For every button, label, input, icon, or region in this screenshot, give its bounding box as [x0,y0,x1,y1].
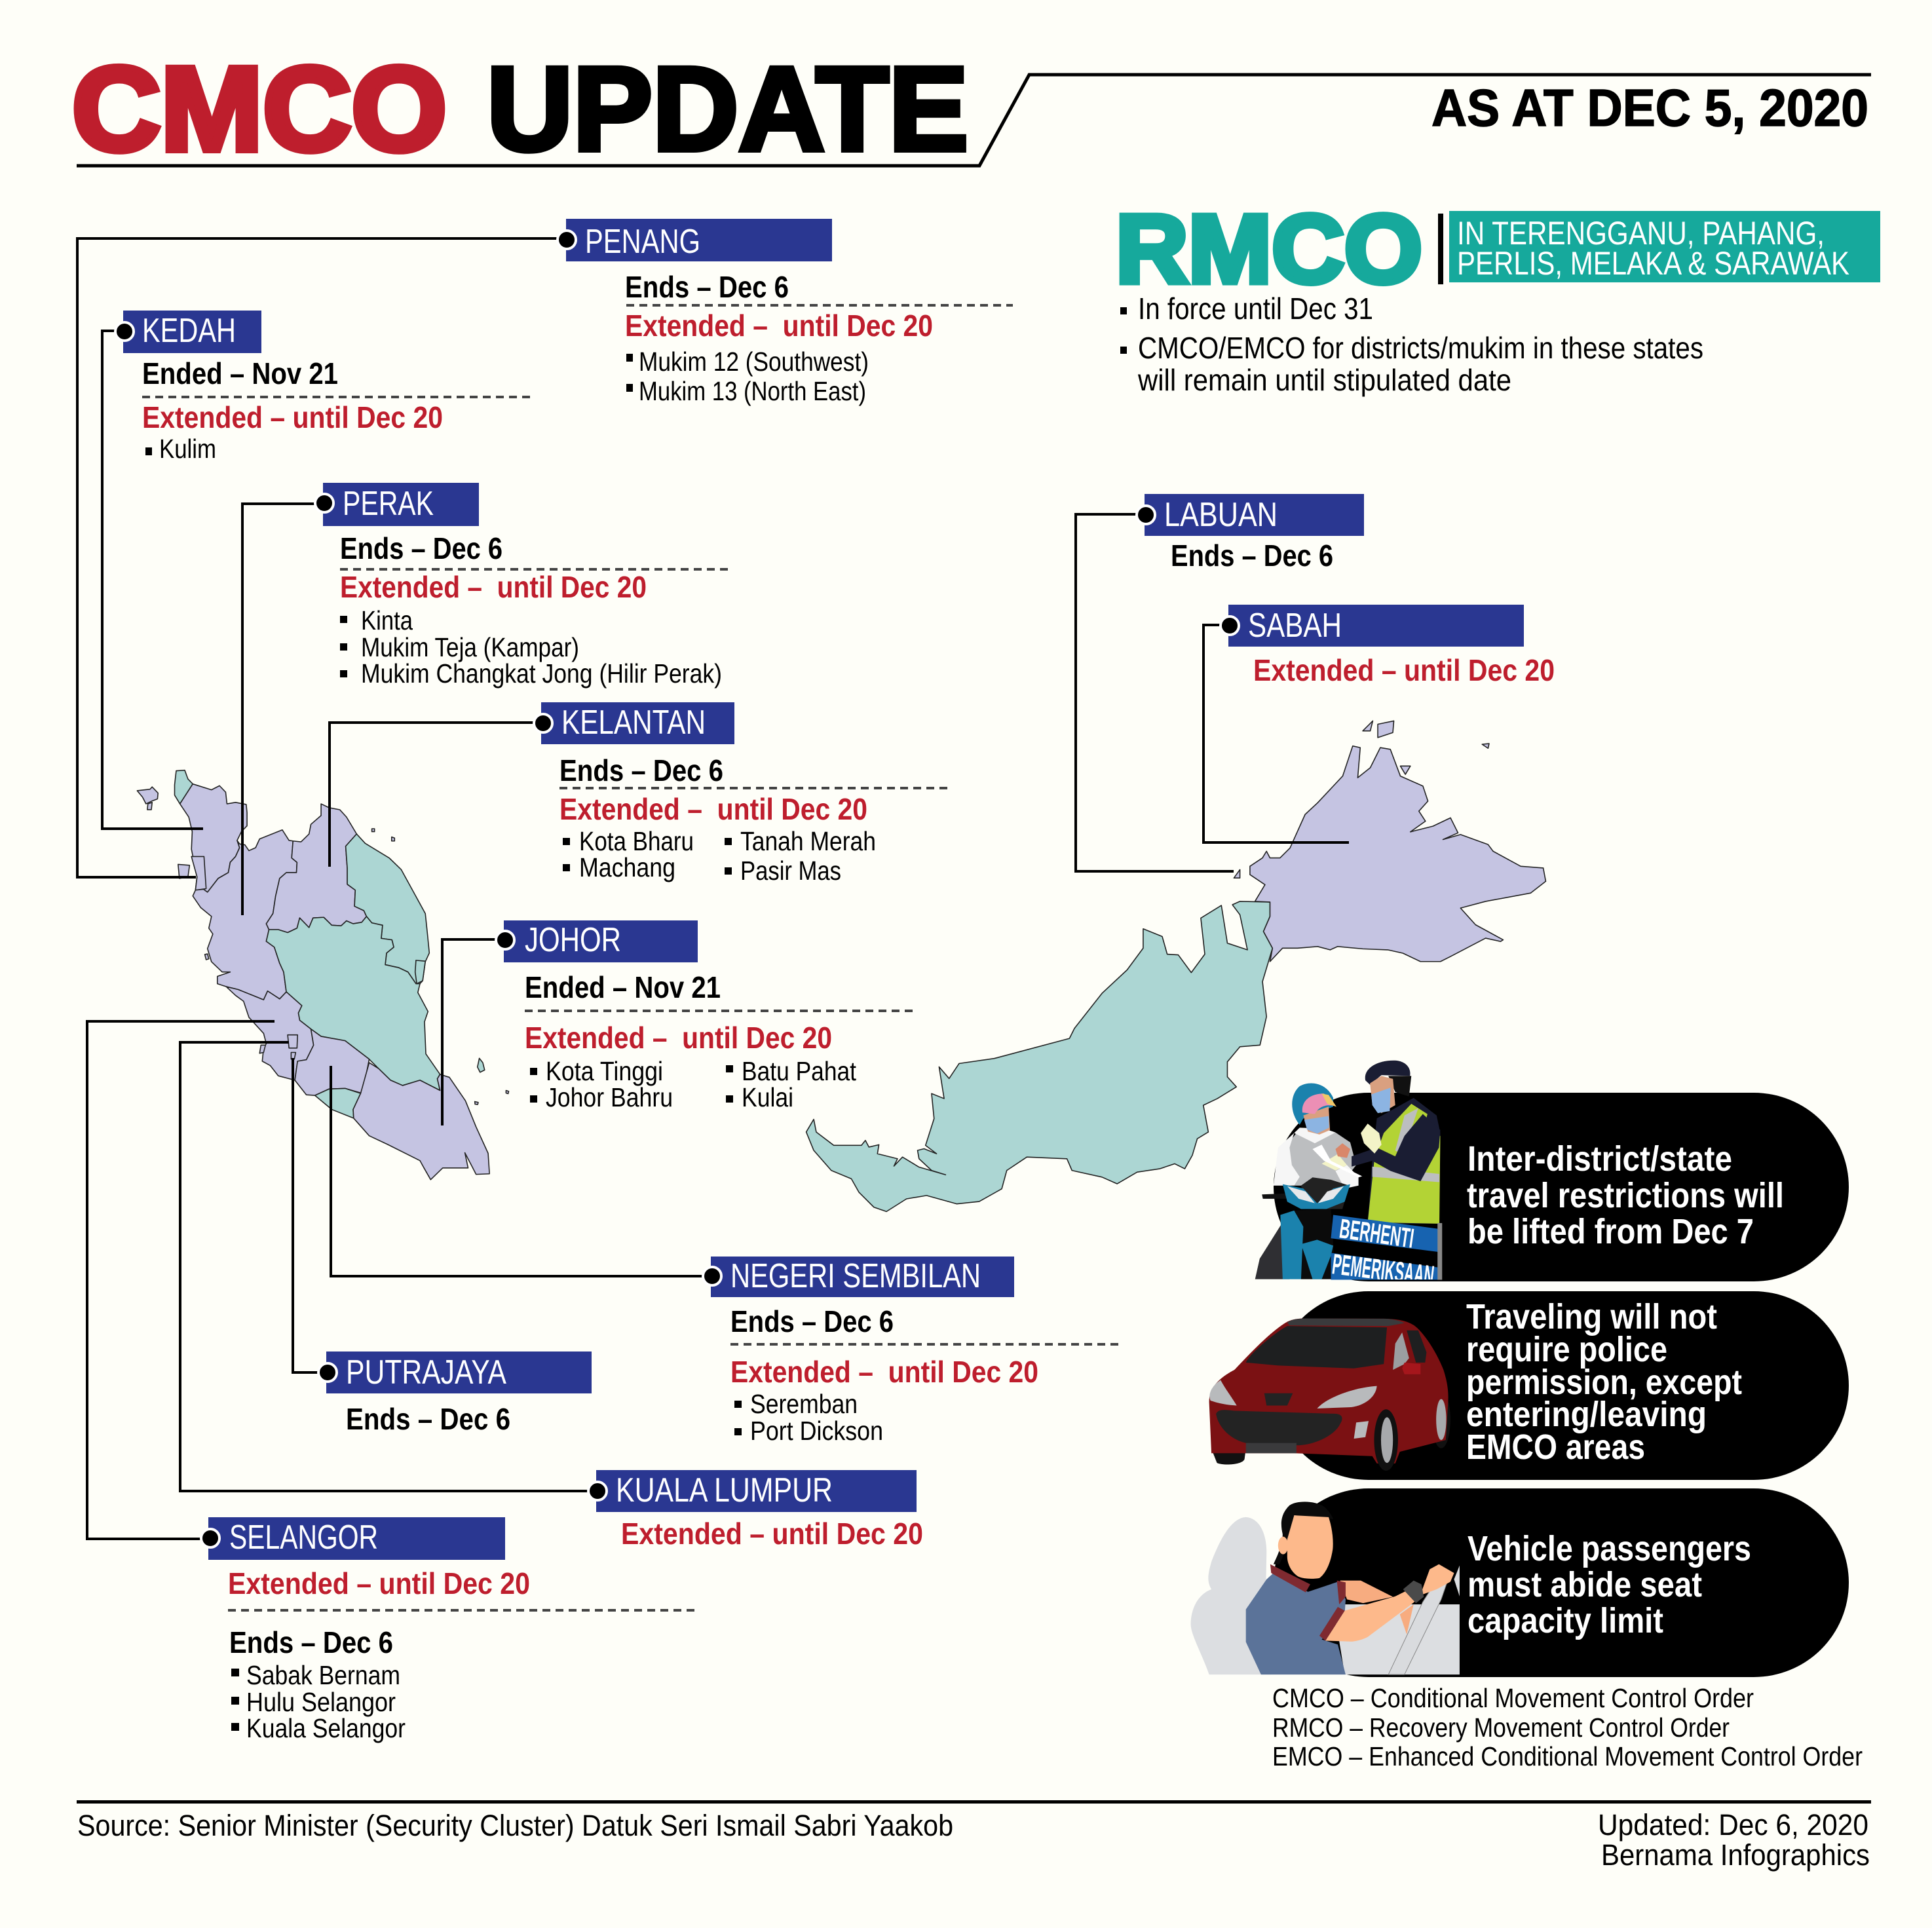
panel: Selangor [201,1517,698,1743]
panel: RMCO: In force until Dec 31 [1138,292,1373,326]
panel: Kuala Lumpur [588,1470,923,1551]
panel: Perak: Ends – Dec 6 [340,531,502,565]
title: CMCO UPDATE: UPDATE [487,42,968,176]
source: Source: Senior Minister (Security Cluster) Datuk Seri Ismail Sabri Yaakob [77,1809,953,1842]
panel: Penang [558,219,1013,406]
panel: Kedah: Extended – until Dec 20 [142,400,443,434]
map: peninsular Malaysia [137,770,508,1180]
panel: Johor [496,920,913,1112]
panel: Penang: Extended – until Dec 20 [625,309,933,343]
panel: Penang: PENANG [585,223,700,261]
icon: police checkpoint: BERHENTI [1338,1213,1416,1254]
panel: Kelantan: Tanah Merah [740,826,876,856]
panel: Selangor: SELANGOR [229,1519,378,1557]
map: Sarawak and Sabah [806,721,1545,1211]
panel: Kelantan: Pasir Mas [740,856,841,886]
credits: Updated: Dec 6, 2020 [1598,1808,1868,1842]
text: police permission: entering/leaving [1466,1395,1707,1434]
title: CMCO UPDATE: CMCO [72,42,447,176]
panel: RMCO: PERLIS, MELAKA & SARAWAK [1457,245,1849,282]
panel: Penang: Mukim 12 (Southwest) [639,347,869,377]
panel: Negeri Sembilan: Port Dickson [750,1416,883,1446]
text: travel restrictions [1467,1139,1784,1251]
panel: Negeri Sembilan: NEGERI SEMBILAN [730,1257,981,1295]
panel: Johor: Kulai [742,1082,793,1112]
panel: Labuan: LABUAN [1164,496,1278,534]
text: travel restrictions: be lifted from Dec 7 [1468,1212,1754,1251]
text: seat capacity: capacity limit [1468,1601,1663,1640]
text: police permission: permission, except [1466,1363,1742,1402]
legend: abbreviations: CMCO – Conditional Movement Control Order [1272,1683,1754,1713]
panel: Kuala Lumpur: KUALA LUMPUR [616,1471,833,1509]
icon: driver [1191,1502,1460,1674]
icon: red car [1209,1318,1450,1471]
panel: travel restrictions [1255,1061,1849,1293]
legend: abbreviations: RMCO – Recovery Movement Control Order [1272,1712,1730,1743]
text: seat capacity: Vehicle passengers [1468,1529,1751,1568]
text: seat capacity: must abide seat [1468,1565,1702,1604]
credits: Bernama Infographics [1601,1838,1870,1872]
panel: seat capacity [1191,1488,1849,1677]
title: CMCO UPDATE [72,42,968,176]
connector lines [77,238,1349,1539]
panel: Kedah: Kulim [159,434,216,464]
panel: Putrajaya [318,1351,592,1436]
text: travel restrictions: Inter-district/state [1468,1139,1732,1179]
panel: Selangor: Extended – until Dec 20 [228,1566,530,1600]
panel: Labuan [1137,494,1364,573]
panel: Perak: Extended – until Dec 20 [340,570,647,604]
panel: Kelantan [534,702,951,886]
panel: Johor: Johor Bahru [546,1082,673,1112]
text: police permission: require police [1466,1330,1667,1369]
panel: police permission [1209,1291,1849,1480]
icon: police checkpoint: PEMERIKSAAN [1331,1248,1436,1293]
panel: Johor: Extended – until Dec 20 [525,1021,832,1055]
panel: Kelantan: KELANTAN [561,704,706,742]
credits [1598,1808,1870,1872]
panel: Perak: Mukim Changkat Jong (Hilir Perak) [361,658,722,689]
panel: Selangor: Ends – Dec 6 [229,1625,393,1659]
footer rule [77,1800,1871,1804]
panel: Kelantan: Ends – Dec 6 [559,753,723,787]
panel: Kuala Lumpur: Extended – until Dec 20 [621,1517,923,1551]
panel: Perak: Mukim Teja (Kampar) [361,632,579,662]
panel: Kedah: Ended – Nov 21 [142,356,338,390]
legend: abbreviations [1272,1683,1863,1771]
panel: Kedah: KEDAH [142,312,236,350]
panel: Sabah: Extended – until Dec 20 [1253,653,1555,687]
legend: abbreviations: EMCO – Enhanced Conditional Movement Control Order [1272,1741,1863,1771]
panel: Negeri Sembilan [703,1257,1119,1446]
panel: Putrajaya: PUTRAJAYA [346,1353,506,1391]
header rule [77,75,1871,166]
panel: Selangor: Kuala Selangor [246,1713,406,1743]
panel: RMCO: RMCO [1116,195,1422,303]
text: police permission: Traveling will not [1466,1297,1717,1336]
panel: Selangor: Sabak Bernam [246,1660,400,1690]
panel: Sabah [1221,605,1555,687]
icon: police checkpoint [1255,1061,1442,1293]
panel: RMCO [1116,195,1880,397]
panel: Johor: Batu Pahat [742,1056,857,1086]
panel: Johor: Ended – Nov 21 [525,970,721,1004]
panel: Labuan: Ends – Dec 6 [1171,539,1333,573]
panel: Sabah: SABAH [1248,607,1342,645]
text: seat capacity [1468,1529,1751,1640]
panel: Johor: JOHOR [525,921,621,959]
panel: RMCO: IN TERENGGANU, PAHANG, [1457,215,1825,252]
text: travel restrictions: travel restrictions will [1467,1176,1784,1215]
panel: Penang: Mukim 13 (North East) [639,376,866,406]
panel: Perak: Kinta [361,605,413,635]
panel: Kelantan: Extended – until Dec 20 [559,792,867,826]
text: police permission [1466,1297,1742,1467]
panel: RMCO: will remain until stipulated date [1137,363,1511,397]
panel: Kedah [115,311,530,464]
panel: Negeri Sembilan: Ends – Dec 6 [730,1304,894,1338]
panel: Penang: Ends – Dec 6 [625,270,789,304]
panel: Kelantan: Machang [579,852,675,882]
panel: Perak: PERAK [343,485,434,523]
panel: Kelantan: Kota Bharu [579,826,694,856]
date: as at Dec 5, 2020: AS AT DEC 5, 2020 [1431,79,1868,137]
panel: Negeri Sembilan: Extended – until Dec 20 [730,1355,1038,1389]
panel: Perak [315,483,730,689]
panel: Johor: Kota Tinggi [546,1056,663,1086]
text: police permission: EMCO areas [1466,1427,1645,1467]
panel: Selangor: Hulu Selangor [246,1687,396,1717]
panel: Putrajaya: Ends – Dec 6 [346,1402,510,1436]
panel: RMCO: CMCO/EMCO for districts/mukim in these states [1138,331,1703,365]
panel: Negeri Sembilan: Seremban [750,1389,858,1419]
